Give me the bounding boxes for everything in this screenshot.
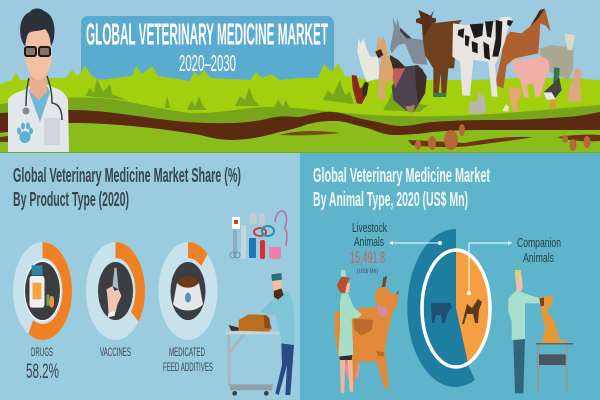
icon: vet supplies bbox=[230, 211, 287, 259]
heading: product type: By Product Type (2020) bbox=[13, 189, 129, 211]
label: companion animals: Companion bbox=[517, 235, 561, 250]
illustration: vet with dog bbox=[508, 270, 573, 393]
panel: animal type bbox=[300, 153, 600, 400]
donut chart: animal type bbox=[407, 229, 490, 387]
title box bbox=[81, 16, 334, 86]
donut: medicated feed additives bbox=[158, 242, 218, 340]
heading: product type: Global Veterinary Medicine Market Share (%) bbox=[13, 165, 241, 187]
donut: vaccines bbox=[86, 242, 145, 340]
heading: animal type: By Animal Type, 2020 (US$ Mn) bbox=[313, 189, 468, 211]
horse bbox=[495, 8, 551, 88]
label: companion animals bbox=[517, 235, 561, 265]
goat bbox=[357, 38, 379, 82]
value unit: (US$ Mn) bbox=[357, 269, 378, 275]
duck bbox=[543, 67, 562, 108]
grass tufts bbox=[85, 78, 428, 112]
label: medicated feed additives: FEED ADDITIVES bbox=[163, 362, 213, 374]
sheep bbox=[540, 33, 575, 80]
donkey bbox=[390, 18, 427, 65]
label: livestock animals: Animals bbox=[354, 234, 384, 249]
label: livestock animals: Livestock bbox=[352, 220, 387, 235]
rabbit bbox=[468, 91, 486, 113]
panel: product type share bbox=[0, 153, 300, 400]
header banner bbox=[0, 0, 600, 153]
arrow: livestock bbox=[389, 241, 442, 245]
turkey bbox=[392, 65, 427, 112]
pig bbox=[512, 55, 550, 97]
animals group right bbox=[452, 8, 582, 113]
chick bbox=[502, 87, 522, 112]
rocks bbox=[415, 124, 590, 151]
heading: product type bbox=[13, 165, 241, 211]
cat bbox=[568, 68, 582, 102]
holstein cow bbox=[452, 17, 513, 97]
label: medicated feed additives bbox=[163, 347, 213, 374]
header banner: 2020–2030 bbox=[179, 50, 236, 76]
label: drugs: DRUGS bbox=[31, 347, 53, 359]
animals group left bbox=[352, 10, 462, 112]
heading: animal type bbox=[313, 165, 490, 211]
arrow: companion bbox=[467, 241, 512, 295]
illustration: vet with cow bbox=[334, 270, 399, 393]
grass and soil bbox=[0, 63, 600, 153]
icon: doctor bbox=[8, 8, 69, 152]
value: drugs share: 58.2% bbox=[26, 360, 59, 383]
rooster bbox=[352, 75, 369, 104]
illustration: vet with dog on table bbox=[226, 273, 295, 396]
icon: cow silhouette bbox=[431, 303, 452, 323]
label: livestock animals bbox=[352, 220, 387, 249]
label: companion animals: Animals bbox=[523, 250, 554, 265]
brown cow bbox=[416, 10, 462, 97]
icon: dog silhouette bbox=[462, 299, 482, 324]
dog bbox=[375, 37, 405, 101]
label: medicated feed additives: MEDICATED bbox=[169, 347, 205, 359]
donut: drugs bbox=[13, 242, 72, 340]
label: vaccines: VACCINES bbox=[100, 347, 131, 359]
value: livestock: 15,491.8 bbox=[350, 248, 385, 267]
